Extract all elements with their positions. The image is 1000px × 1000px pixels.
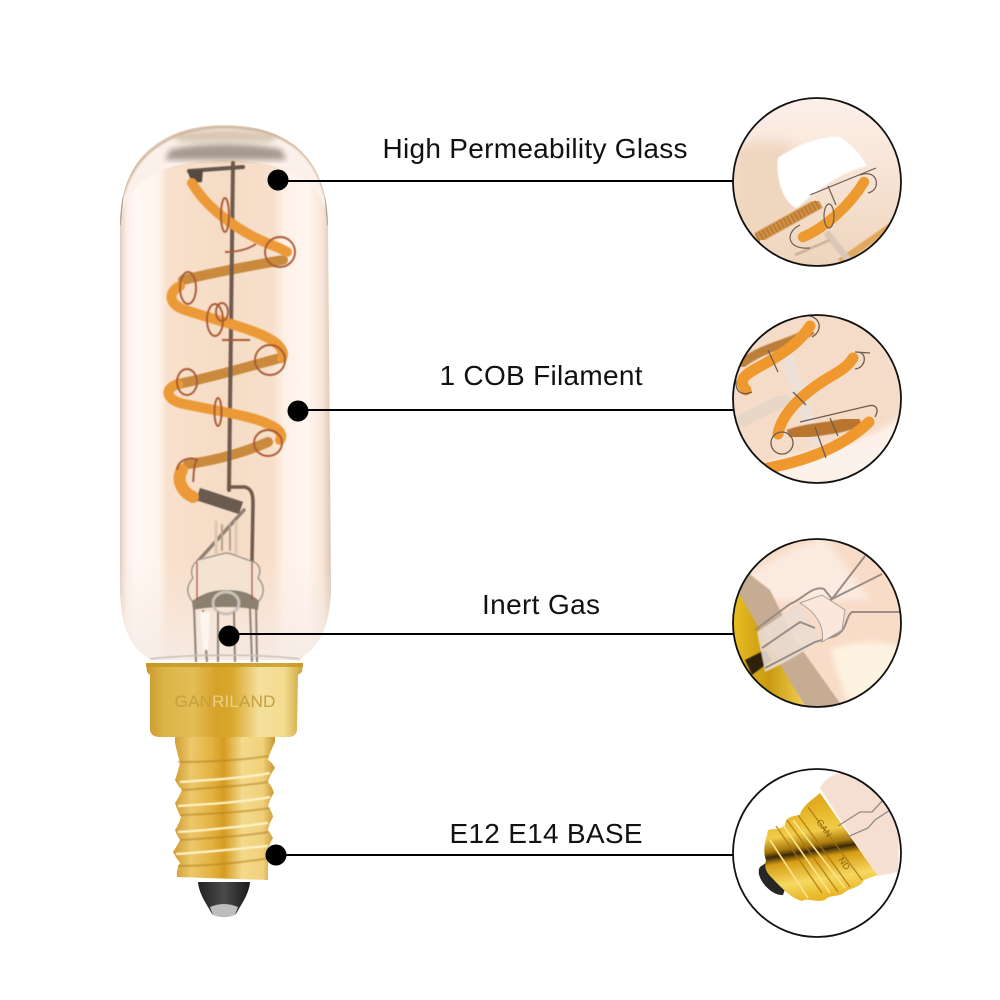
detail circle: base: GAN <box>814 817 834 839</box>
detail circle: gas stem <box>733 538 905 710</box>
callout: E12 E14 base <box>266 818 734 866</box>
light bulb <box>118 120 333 917</box>
detail circle: base <box>733 769 901 937</box>
contact tip <box>198 882 250 917</box>
callout: 1 COB filament <box>288 360 734 422</box>
filament rear segments <box>178 260 283 464</box>
screw thread <box>173 737 275 880</box>
label: High Permeability Glass <box>382 133 688 164</box>
callout: high permeability glass <box>268 133 734 190</box>
metal collar <box>146 663 303 737</box>
glass stem and press seal <box>150 553 300 662</box>
detail circle: base: ND <box>836 855 852 872</box>
leader line <box>298 409 734 411</box>
glass envelope <box>118 120 333 665</box>
detail circle: glass <box>733 98 901 266</box>
dot marker <box>218 626 240 646</box>
label: 1 COB Filament <box>440 360 643 391</box>
callout: inert gas <box>218 589 734 646</box>
dot marker <box>266 844 286 866</box>
leader line <box>229 633 734 635</box>
dot marker <box>268 170 288 190</box>
support rod and leads <box>187 163 253 562</box>
leader line <box>276 854 734 856</box>
label: E12 E14 BASE <box>450 818 642 849</box>
label: Inert Gas <box>482 589 600 620</box>
brand text: GANRILAND <box>174 692 276 711</box>
dot marker <box>288 400 308 422</box>
detail circle: filament <box>733 315 901 483</box>
leader line <box>278 180 734 182</box>
filament front segments <box>168 183 287 497</box>
copper wire loops <box>177 198 295 482</box>
